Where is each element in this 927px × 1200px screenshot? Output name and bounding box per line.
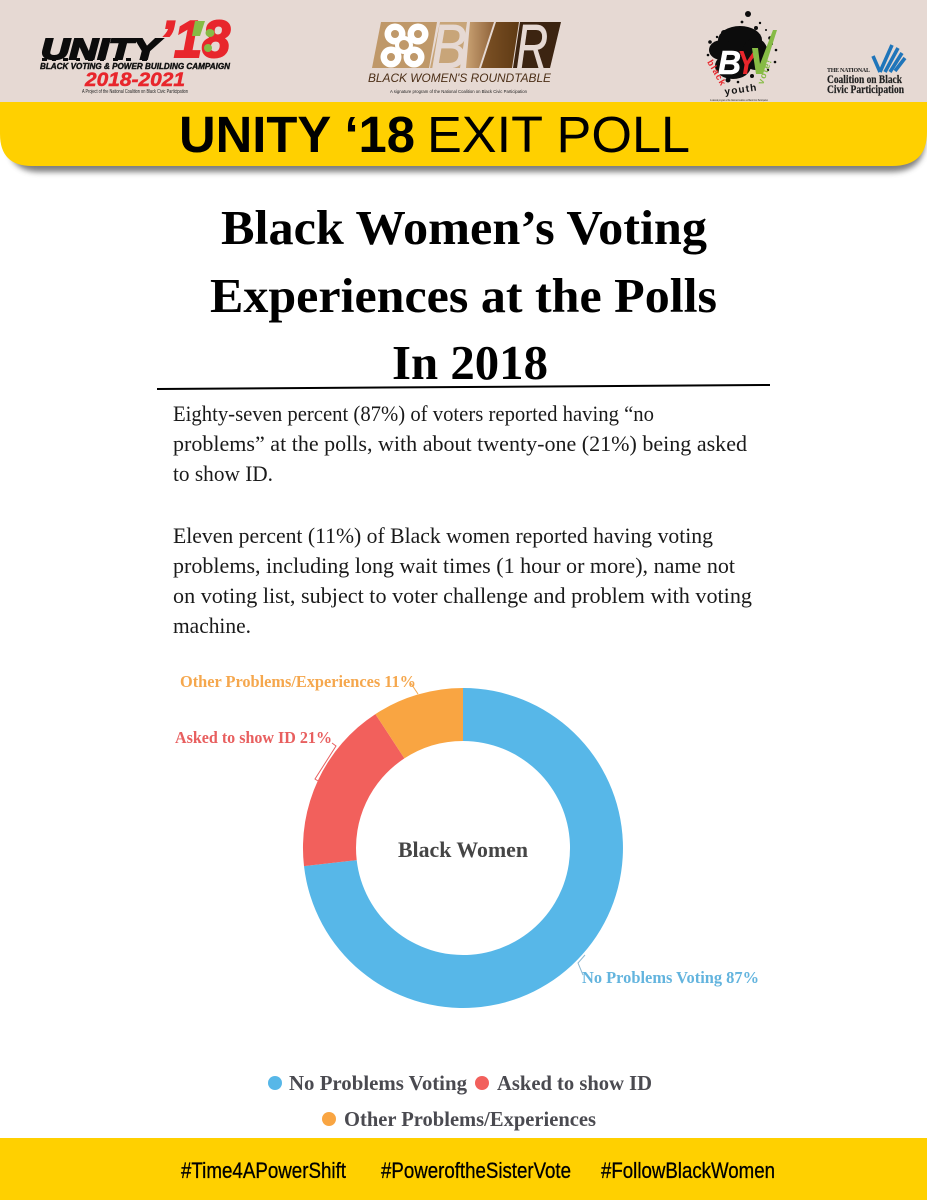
legend item: no problems voting: No Problems Voting [289,1071,467,1095]
banner title: EXIT POLL [427,106,690,163]
header band [0,0,927,103]
banner title [179,106,690,163]
text block: voting problems summary: Eleven percent (11%) of Black women reported having voting [173,523,713,548]
footer band with hashtags: #FollowBlackWomen [601,1158,775,1183]
text block: no problems summary: problems” at the polls, with about twenty-one (21%) being asked [173,431,747,456]
logo: Unity 18: BLACK VOTING & POWER BUILDING CAMPAIGN [40,61,231,71]
text block: voting problems summary [173,523,752,638]
logo: Black Women's Roundtable: A signature program of the National Coalition on Black Civic Participation [390,89,527,94]
title: Experiences at the Polls [210,268,717,323]
logo: Black Youth Vote [705,11,777,102]
logo: Black Women's Roundtable: R [516,13,548,82]
label: asked to show ID [175,728,336,781]
slice: no problems voting [304,688,623,1008]
legend item: other problems: Other Problems/Experiences [344,1107,596,1131]
label: no problems voting [578,955,759,987]
label: no problems voting: No Problems Voting 87% [582,968,759,987]
title [210,200,717,390]
logo: Black Youth Vote: vote! [755,57,774,86]
text block: voting problems summary: on voting list, subject to voter challenge and problem with voting [173,583,752,608]
text block: voting problems summary: machine. [173,613,251,638]
logo: Black Youth Vote: black [705,58,728,88]
logo: National Coalition on Black Civic Participation: THE NATIONAL [827,68,870,74]
logo: Unity 18: A Project of the National Coalition on Black Civic Participation [82,89,188,95]
logo: Black Youth Vote: B [718,44,741,81]
banner title: UNITY ‘18 [179,106,415,163]
logo: Unity 18: UNITY [41,34,163,66]
slice: asked to show ID [303,714,404,866]
slice: other problems [375,688,463,758]
logo: National Coalition on Black Civic Participation [827,45,905,96]
footer band with hashtags: #Time4APowerShift [181,1158,346,1183]
label: other problems: Other Problems/Experiences 11% [180,672,416,691]
footer band with hashtags: #PoweroftheSisterVote [381,1158,571,1183]
logo: Black Youth Vote: Y [737,44,759,81]
title: Black Women’s Voting [221,200,708,255]
text block: no problems summary: Eighty-seven percent (87%) of voters reported having “no [173,401,654,426]
text block: voting problems summary: problems, including long wait times (1 hour or more), name not [173,553,735,578]
logo: National Coalition on Black Civic Participation: Coalition on Black [827,72,902,86]
text block: no problems summary: to show ID. [173,461,273,486]
title: In 2018 [392,335,548,390]
logo: Black Youth Vote: youth [724,82,758,98]
logo: Black Women's Roundtable: BLACK WOMEN'S ROUNDTABLE [368,73,551,85]
footer band with hashtags [0,1138,927,1200]
donut chart [175,672,759,1008]
legend [268,1071,652,1131]
label: asked to show ID: Asked to show ID 21% [175,728,332,747]
logo: Black Women's Roundtable: B [431,13,467,82]
banner [0,102,927,172]
logo: Black Women's Roundtable [368,13,561,94]
logo: Unity 18: ’18 [160,11,230,69]
legend item: asked to show ID: Asked to show ID [497,1071,652,1095]
text block: no problems summary [173,401,747,486]
logo: Unity 18 [40,11,231,95]
logo: Unity 18: 2018-2021 [84,70,185,91]
logo: National Coalition on Black Civic Participation: Civic Participation [827,82,904,96]
center label: Black Women [398,837,528,862]
logo: Black Youth Vote: A national program of the National Coalition on Black Civic Participation [710,98,768,102]
